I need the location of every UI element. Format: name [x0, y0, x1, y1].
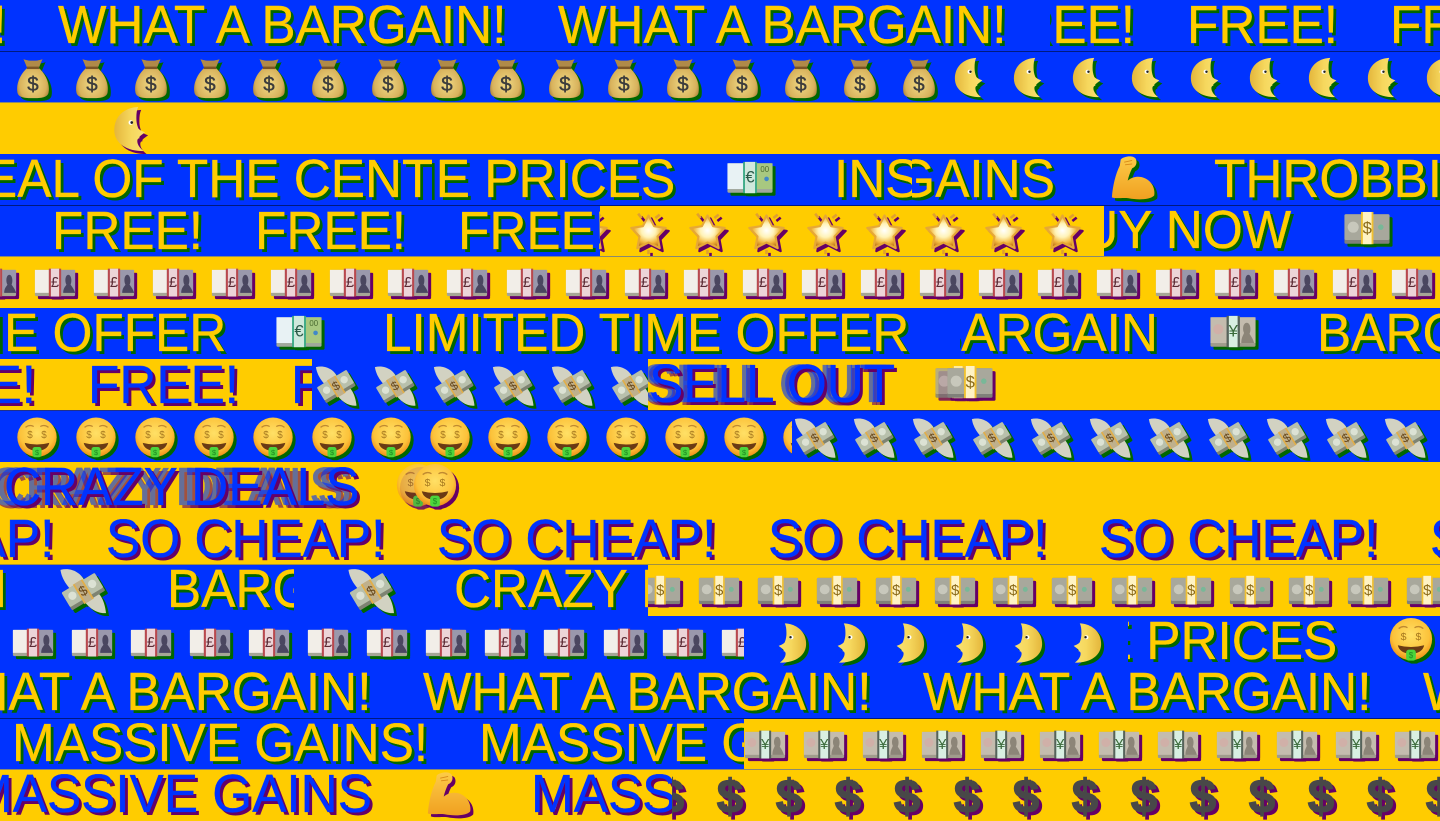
ticker: crazy deals — [294, 564, 648, 616]
ticker: free on yellow — [0, 359, 312, 410]
banner row 1 — [0, 0, 1440, 51]
icons: flying money — [312, 359, 648, 410]
ticker: insane prices — [1128, 616, 1440, 667]
icons: stars — [600, 205, 1104, 257]
banner row 4 — [0, 154, 1440, 205]
icons: money bags — [0, 51, 940, 103]
icon strip: single moon — [0, 103, 1440, 154]
ticker: bargain — [960, 308, 1440, 359]
ticker: what a bargain — [0, 667, 1440, 718]
icons: heavy dollar signs — [672, 770, 1440, 821]
icons: pound notes — [0, 257, 1440, 308]
ticker: buy now — [1104, 205, 1440, 257]
ticker: sell out — [648, 359, 1440, 410]
icons: moons — [940, 51, 1440, 103]
ticker: insane prices — [432, 154, 912, 205]
ticker: limited time offer — [0, 308, 960, 359]
banner row 14 — [0, 667, 1440, 718]
icons: dollar notes — [648, 564, 1440, 616]
banner row 7 — [0, 308, 1440, 359]
ticker: what a bargain — [0, 0, 1050, 51]
banner row 16 — [0, 770, 1440, 821]
icons: moons — [744, 616, 1128, 667]
banner row 10 — [0, 462, 1440, 513]
ticker: massive gains — [0, 718, 744, 770]
banner row 13 — [12, 616, 1436, 667]
banner row 2 — [17, 58, 1440, 102]
banner row 8 — [0, 359, 1440, 410]
ticker: bargain — [0, 564, 294, 616]
icons: yen notes — [744, 718, 1440, 770]
banner row 15 — [12, 718, 1440, 770]
ticker: free — [0, 205, 600, 257]
ticker: free — [1050, 0, 1440, 51]
icons: flying money — [792, 410, 1440, 462]
banner row 11 — [0, 513, 1440, 564]
banner row 3 — [0, 103, 1440, 154]
icons: money faces — [0, 410, 792, 462]
banner row 6 — [0, 257, 1440, 308]
ticker: crazy deals — [0, 462, 1440, 513]
banner row 9 — [17, 418, 1428, 461]
ticker: so cheap — [0, 513, 1440, 564]
banner row 5 — [52, 205, 1393, 257]
ticker: massive gains and throbbing — [912, 154, 1440, 205]
icons: pound notes — [0, 616, 744, 667]
banner row 12 — [0, 564, 1440, 616]
ticker: massive gains — [0, 770, 672, 821]
